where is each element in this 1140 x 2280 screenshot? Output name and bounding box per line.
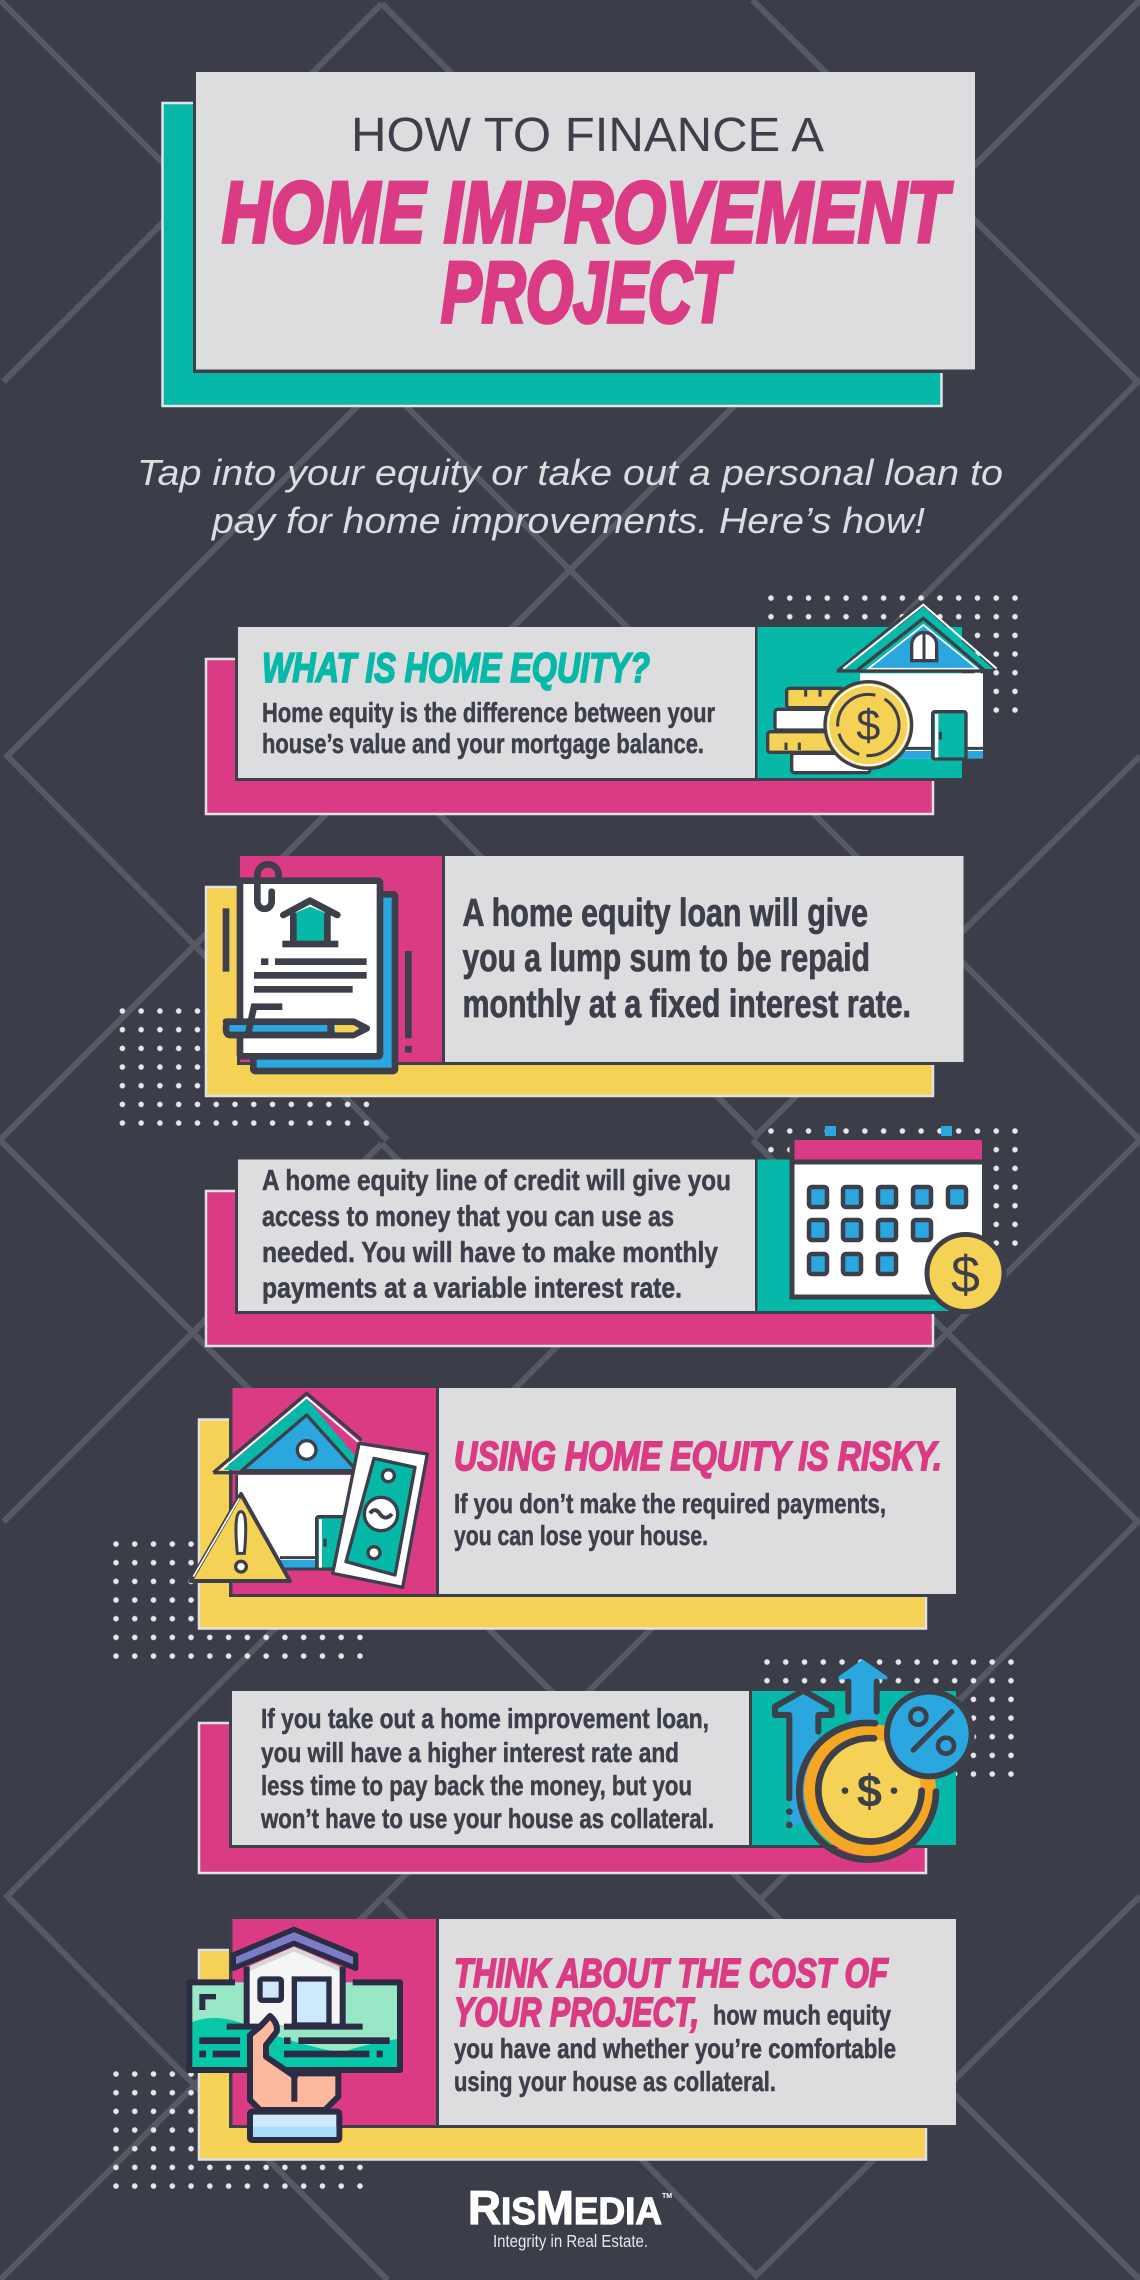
- panel: home improvement loan: [199, 1659, 972, 1873]
- logo: RISMedia: TM: [662, 2193, 672, 2200]
- logo: RISMedia: Integrity in Real Estate.: [493, 2231, 648, 2251]
- body text: you a lump sum to be repaid: [462, 937, 870, 980]
- body text: house’s value and your mortgage balance.: [262, 728, 704, 759]
- body text: won’t have to use your house as collateral.: [260, 1803, 714, 1834]
- body text: you have and whether you’re comfortable: [454, 2033, 896, 2064]
- body text: [462, 892, 911, 1026]
- body text: A home equity line of credit will give you: [262, 1165, 731, 1197]
- body text: less time to pay back the money, but you: [261, 1770, 692, 1801]
- subtitle: Tap into your equity or take out a personal loan to: [137, 452, 1003, 493]
- icon: house with coins: [768, 601, 997, 773]
- body text: A home equity loan will give: [462, 892, 868, 935]
- icon: house, warning sign and money: [191, 1393, 427, 1587]
- icon: loan document with pen: [223, 864, 412, 1071]
- heading: think about the cost of your project: [454, 1950, 889, 2035]
- body text: [260, 1703, 714, 1834]
- heading: think about the cost of your project: YOUR PROJECT,: [454, 1989, 699, 2035]
- body text: you will have a higher interest rate and: [261, 1737, 679, 1768]
- body text: access to money that you can use as: [262, 1201, 674, 1233]
- panel: what is home equity: [206, 601, 997, 814]
- heading: think about the cost of your project: THINK ABOUT THE COST OF: [454, 1950, 889, 1996]
- body text: you can lose your house.: [454, 1520, 708, 1551]
- title line: project: PROJECT: [441, 245, 734, 341]
- icon: hand holding check with house: [189, 1929, 400, 2140]
- panel: think about the cost: [189, 1919, 956, 2160]
- body text: using your house as collateral.: [454, 2066, 776, 2097]
- icon: coin, arrows and percent: [775, 1659, 972, 1860]
- panel: home equity line of credit: [206, 1126, 1004, 1346]
- body text: Home equity is the difference between your: [262, 697, 715, 728]
- icon: coin, arrows and percent: $: [857, 1766, 882, 1817]
- body text: If you don’t make the required payments,: [454, 1488, 886, 1519]
- title line: home improvement: HOME IMPROVEMENT: [222, 165, 953, 261]
- panel: home equity loan: [206, 856, 964, 1096]
- heading: using home equity is risky: USING HOME EQUITY IS RISKY.: [454, 1433, 942, 1479]
- icon: house with coins: $: [856, 702, 880, 750]
- logo: RISMedia: RISMEDIA: [468, 2181, 662, 2234]
- body text: how much equity: [713, 2000, 891, 2030]
- icon: calendar with coin: $: [951, 1246, 980, 1304]
- title panel: [162, 72, 975, 406]
- body text: [262, 1165, 731, 1304]
- subtitle: [137, 452, 1003, 541]
- body text: [454, 1488, 886, 1551]
- body text: [262, 697, 715, 759]
- panel: using home equity is risky: [191, 1388, 956, 1628]
- title line: how to finance a: HOW TO FINANCE A: [351, 109, 824, 162]
- body text: If you take out a home improvement loan,: [261, 1703, 709, 1734]
- icon: calendar with coin: [792, 1126, 1004, 1312]
- body text: [454, 2000, 896, 2097]
- heading: what is home equity: WHAT IS HOME EQUITY?: [262, 644, 650, 692]
- body text: payments at a variable interest rate.: [262, 1272, 682, 1304]
- body text: monthly at a fixed interest rate.: [462, 983, 911, 1026]
- body text: needed. You will have to make monthly: [262, 1237, 718, 1269]
- subtitle: pay for home improvements. Here’s how!: [211, 500, 925, 541]
